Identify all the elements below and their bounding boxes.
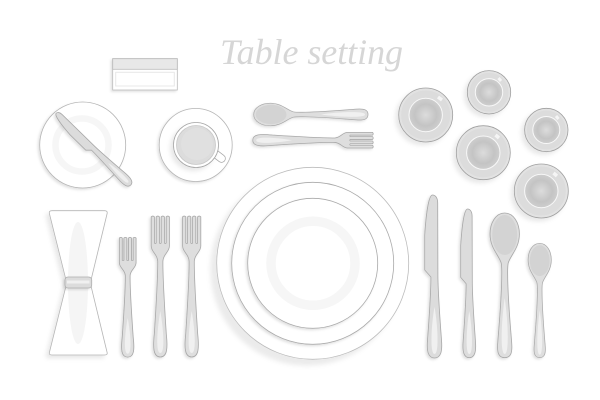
salad fork	[119, 237, 136, 357]
dinner plate	[232, 182, 394, 344]
soup spoon	[490, 213, 519, 358]
napkin fold	[68, 222, 88, 344]
fork, horizontal	[253, 132, 373, 148]
glass 2	[467, 71, 511, 114]
cup	[174, 122, 218, 168]
coffee cup on saucer	[159, 108, 232, 182]
cup handle	[213, 152, 222, 158]
soup plate	[248, 198, 378, 328]
dinner fork	[151, 216, 169, 357]
glass 5	[514, 164, 568, 218]
glass 4	[525, 108, 568, 152]
fish fork	[183, 216, 201, 357]
glasses group	[399, 71, 568, 218]
napkin with ring	[49, 211, 107, 355]
saucer	[159, 108, 232, 182]
napkin	[49, 211, 107, 355]
dinner knife	[425, 195, 442, 358]
bread plate	[40, 102, 126, 188]
glass 1	[399, 88, 453, 142]
dinner plates	[217, 167, 409, 359]
spoon, horizontal	[254, 103, 368, 126]
glass 3	[456, 126, 510, 180]
butter knife	[52, 109, 134, 190]
plate centre ring	[271, 221, 355, 305]
napkin ring	[65, 277, 92, 288]
bread plate with butter knife	[40, 102, 134, 190]
teaspoon	[528, 243, 551, 358]
title: Table setting	[220, 32, 403, 72]
charger plate	[217, 167, 409, 359]
name card	[113, 59, 177, 90]
fish knife	[461, 209, 476, 358]
